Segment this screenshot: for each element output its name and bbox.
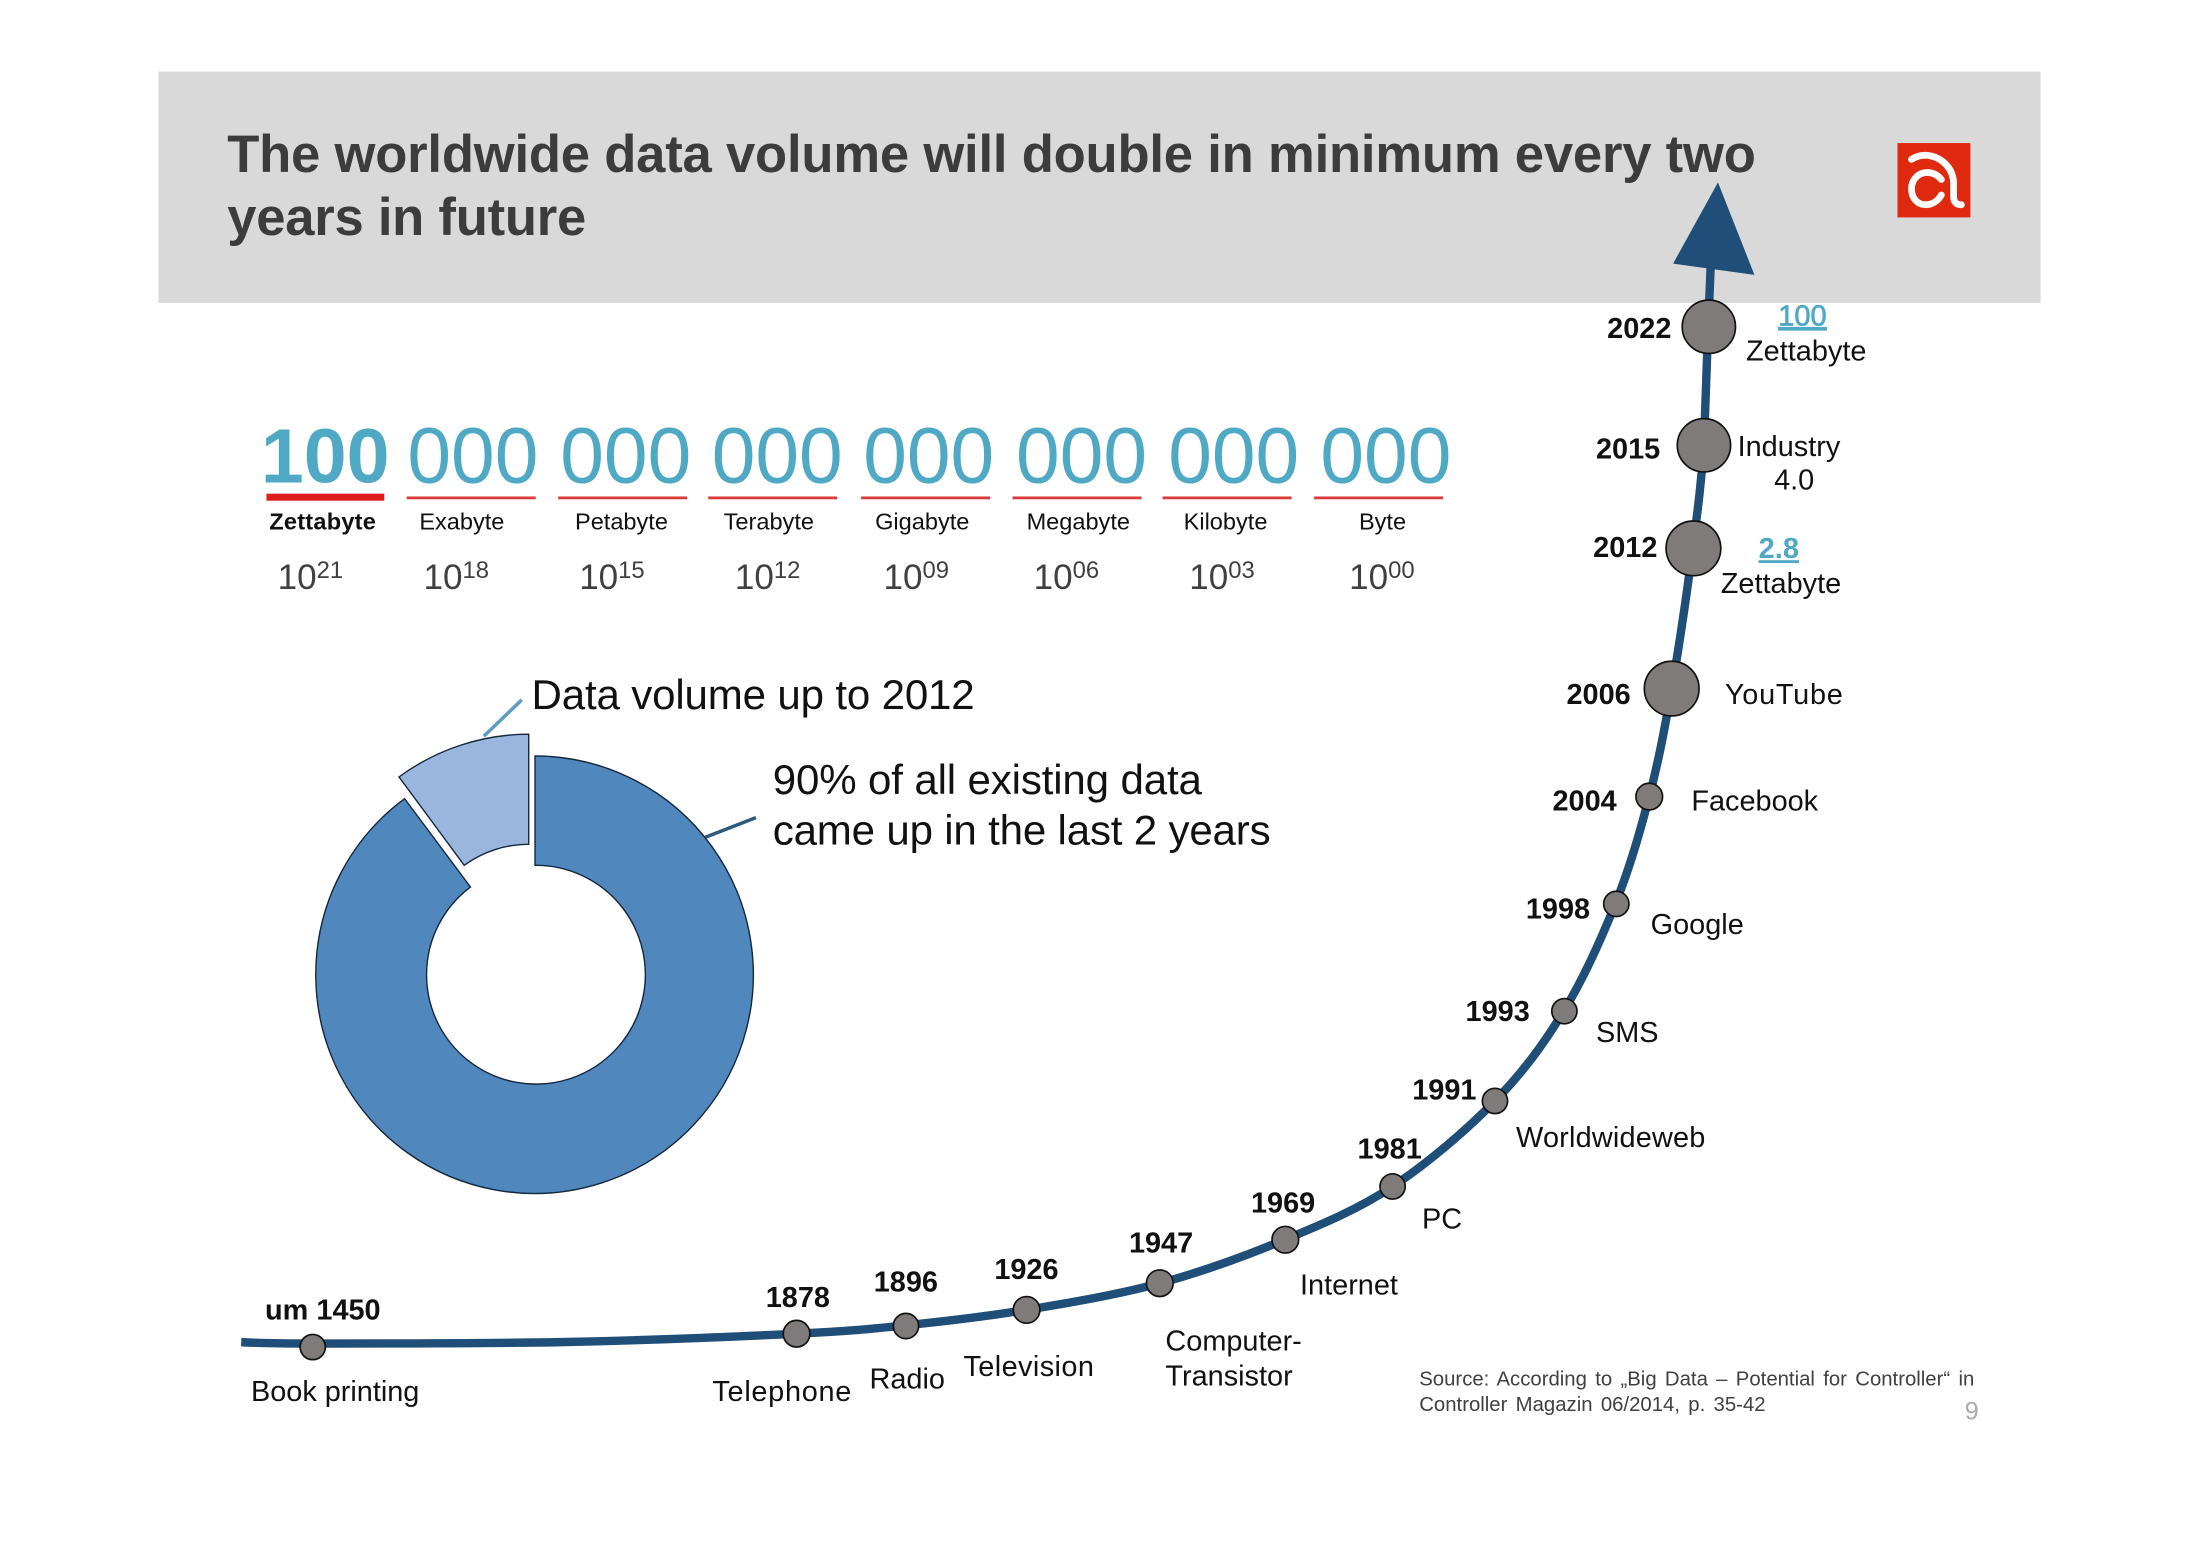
powers of ten: 10 — [884, 558, 923, 597]
source note: Source: According to „Big Data – Potential for Controller“ in — [1419, 1369, 1974, 1391]
powers of ten: 09 — [923, 557, 949, 584]
timeline event labels — [251, 300, 1866, 1408]
timeline event labels: Television — [963, 1351, 1094, 1383]
timeline years: 1969 — [1251, 1187, 1315, 1219]
timeline years: 1896 — [874, 1267, 938, 1299]
timeline event labels: 100 — [1778, 300, 1827, 332]
donut label: 90 percent — [773, 756, 1271, 853]
timeline event labels: Computer- — [1165, 1326, 1302, 1358]
timeline nodes — [300, 300, 1735, 1360]
timeline event labels: Zettabyte — [1721, 568, 1841, 600]
donut label: 90 percent: 90% of all existing data — [773, 756, 1202, 803]
timeline event labels: 4.0 — [1774, 464, 1814, 496]
timeline event labels: Telephone — [712, 1376, 851, 1408]
timeline years: 1878 — [766, 1282, 830, 1314]
unit names: Petabyte — [575, 508, 668, 534]
timeline years: 1998 — [1526, 894, 1590, 926]
timeline event labels: Radio — [870, 1363, 945, 1395]
timeline event labels: Transistor — [1165, 1361, 1293, 1393]
unit names: Zettabyte — [269, 508, 376, 534]
leader line: dark slice — [705, 818, 756, 837]
timeline years: 2015 — [1596, 434, 1660, 466]
unit names: Megabyte — [1027, 508, 1130, 534]
timeline years: 1926 — [994, 1254, 1059, 1286]
icon: company logo — [1897, 143, 1970, 217]
big number digits: 000 — [712, 411, 843, 499]
powers of ten: 10 — [735, 558, 774, 597]
powers of ten: 06 — [1073, 557, 1099, 584]
timeline event labels: Internet — [1300, 1269, 1398, 1301]
slice: 90 percent — [316, 756, 753, 1193]
powers of ten: 15 — [618, 557, 645, 584]
source note — [1419, 1369, 1974, 1416]
timeline event labels: Zettabyte — [1746, 335, 1866, 367]
timeline event labels: Book printing — [251, 1376, 419, 1408]
powers of ten: 10 — [278, 558, 317, 597]
donut chart — [316, 734, 753, 1193]
timeline event labels: 2.8 — [1759, 533, 1799, 565]
slice: data volume up to 2012 — [399, 734, 529, 865]
timeline years: 2004 — [1552, 786, 1617, 818]
powers of ten: 10 — [579, 558, 618, 597]
unit names: Byte — [1359, 508, 1406, 534]
big number digits: 000 — [1320, 411, 1451, 499]
red underlines — [266, 494, 1443, 501]
timeline event labels: Worldwideweb — [1516, 1122, 1705, 1154]
unit names: Gigabyte — [875, 508, 969, 534]
powers of ten: 10 — [1349, 558, 1388, 597]
title — [227, 125, 1756, 247]
unit names: Exabyte — [419, 508, 504, 534]
big number digits — [261, 411, 1451, 499]
timeline years: um 1450 — [265, 1295, 381, 1327]
timeline event labels: Industry — [1738, 431, 1841, 463]
timeline event labels: PC — [1422, 1204, 1462, 1236]
big number digits: 000 — [1168, 411, 1299, 499]
unit names: Kilobyte — [1184, 508, 1267, 534]
big number digits: 100 — [261, 413, 390, 499]
donut label: 90 percent: came up in the last 2 years — [773, 806, 1271, 853]
timeline event labels: YouTube — [1725, 679, 1843, 711]
timeline event labels: Facebook — [1691, 786, 1819, 818]
timeline years: 2022 — [1607, 313, 1671, 345]
timeline years: 1991 — [1412, 1075, 1476, 1107]
leader line: light slice — [484, 700, 522, 736]
donut label: data volume: Data volume up to 2012 — [532, 671, 975, 718]
powers of ten: 00 — [1388, 557, 1415, 584]
powers of ten: 18 — [463, 557, 489, 584]
powers of ten: 03 — [1228, 557, 1255, 584]
big number digits: 000 — [863, 411, 994, 499]
powers of ten: 10 — [424, 558, 463, 597]
timeline years — [265, 313, 1671, 1327]
timeline years: 1947 — [1129, 1227, 1193, 1259]
powers of ten: 12 — [774, 557, 800, 584]
timeline years: 1981 — [1358, 1133, 1422, 1165]
growth curve — [241, 259, 1711, 1344]
number scale: digit groups with units and powers — [261, 411, 1451, 597]
timeline event labels: Google — [1651, 909, 1744, 941]
timeline years: 2006 — [1567, 679, 1631, 711]
source note: Controller Magazin 06/2014, p. 35-42 — [1419, 1394, 1766, 1416]
unit names — [269, 508, 1406, 534]
page number: 9 — [1965, 1397, 1979, 1425]
arrow head — [1673, 182, 1754, 275]
powers of ten — [278, 557, 1415, 597]
powers of ten: 10 — [1034, 558, 1073, 597]
unit names: Terabyte — [724, 508, 814, 534]
title: The worldwide data volume will double in minimum every two — [227, 125, 1756, 184]
header band — [158, 72, 2041, 303]
powers of ten: 21 — [317, 557, 343, 584]
timeline years: 2012 — [1593, 532, 1657, 564]
big number digits: 000 — [560, 411, 691, 499]
timeline years: 1993 — [1466, 996, 1530, 1028]
powers of ten: 10 — [1189, 558, 1228, 597]
title: years in future — [227, 188, 586, 247]
big number digits: 000 — [407, 411, 538, 499]
big number digits: 000 — [1016, 411, 1147, 499]
timeline event labels: SMS — [1596, 1017, 1659, 1049]
